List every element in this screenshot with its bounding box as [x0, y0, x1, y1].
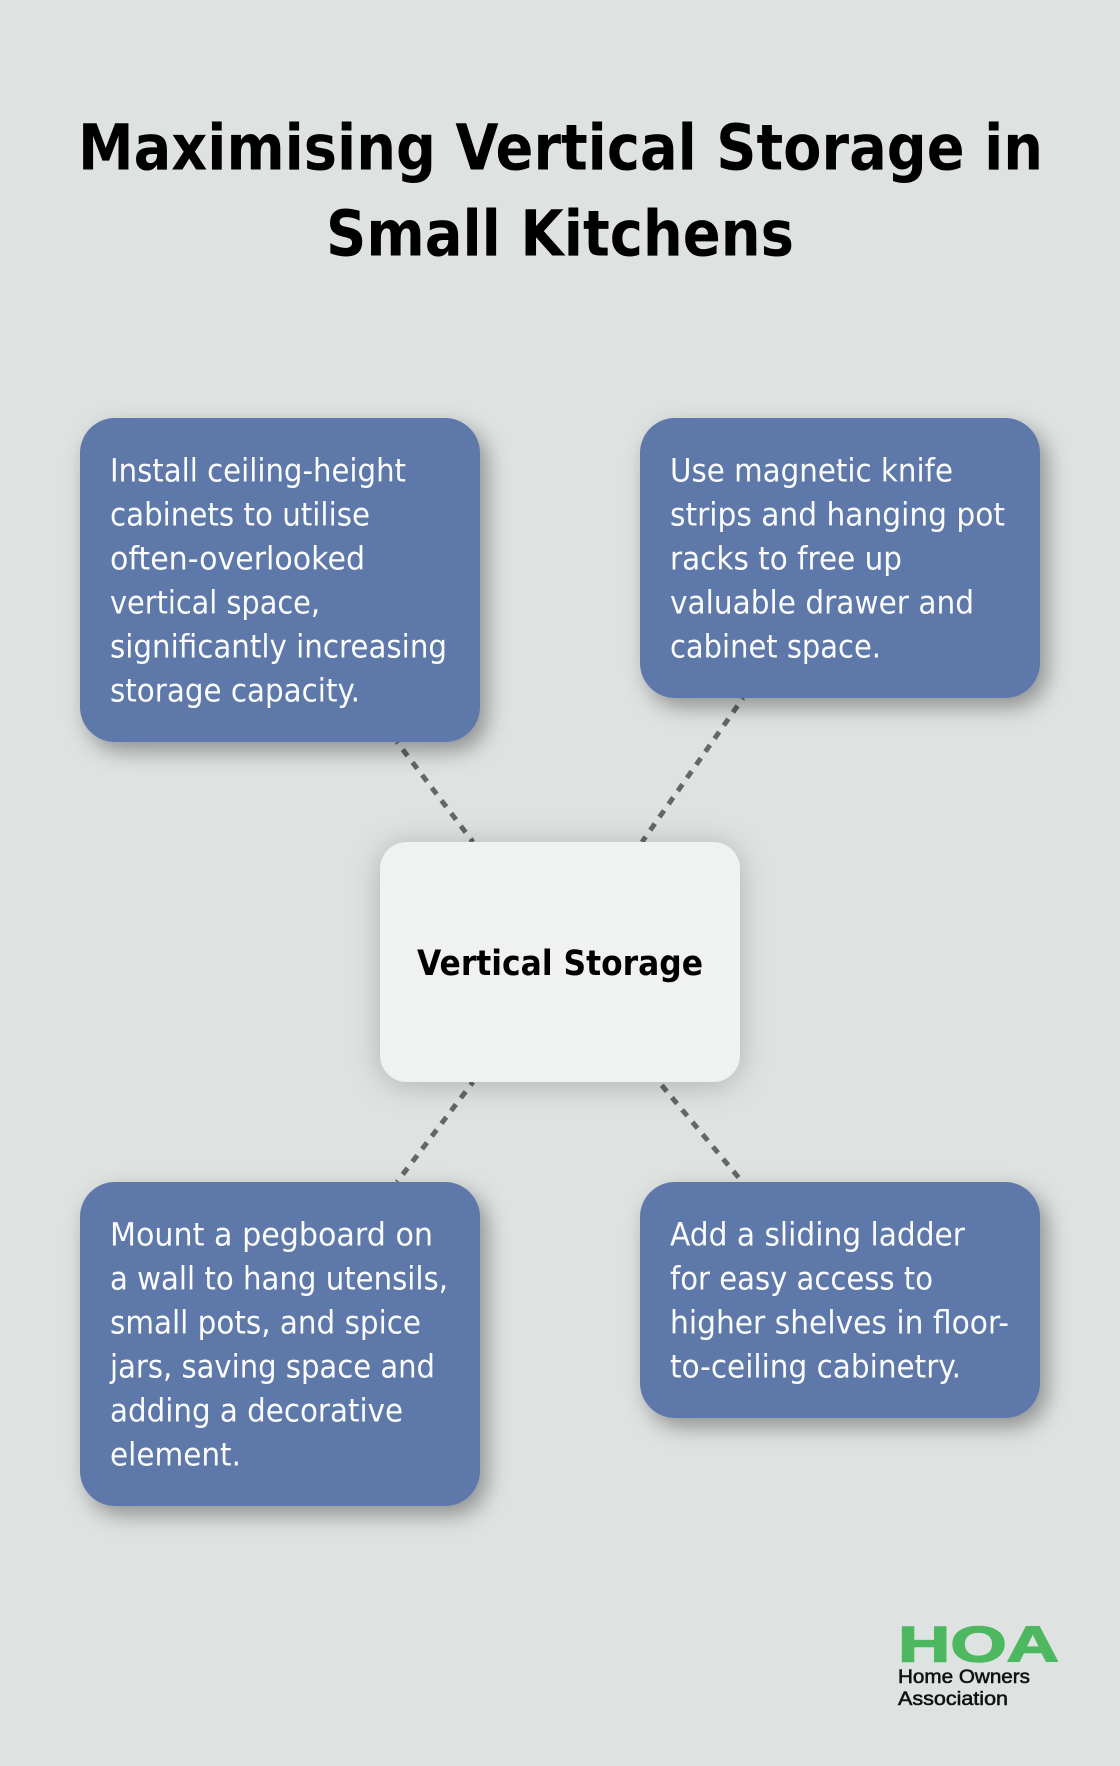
connector: top-left box to centre: [397, 742, 473, 842]
connector: bottom-left box to centre: [397, 1082, 473, 1182]
logo wordmark: Home Owners: [898, 1667, 1030, 1688]
box text: Mount a pegboard on: [110, 1216, 433, 1254]
box text: cabinets to utilise: [110, 496, 370, 534]
box text: strips and hanging pot: [670, 496, 1005, 534]
box text: storage capacity.: [110, 672, 360, 710]
box background: [640, 1182, 1040, 1418]
box text: jars, saving space and: [109, 1348, 435, 1386]
box text: Add a sliding ladder: [670, 1216, 966, 1254]
box text: a wall to hang utensils,: [110, 1260, 448, 1298]
panel: sliding ladder: [640, 1182, 1040, 1418]
box background: [80, 418, 480, 742]
box background: [80, 1182, 480, 1506]
box text: small pots, and spice: [110, 1304, 421, 1342]
logo mark: HOA: [898, 1616, 1059, 1672]
box text: higher shelves in floor-: [670, 1304, 1009, 1342]
connector: top-right box to centre: [642, 698, 743, 842]
panel: ceiling-height cabinets: [80, 418, 480, 742]
panel: pegboard: [80, 1182, 480, 1506]
box text: [110, 452, 447, 710]
title: Small Kitchens: [326, 198, 794, 270]
panel: magnetic strips and pot racks: [640, 418, 1040, 698]
box text: vertical space,: [110, 584, 320, 622]
box text: Install ceiling-height: [110, 452, 406, 490]
connector: bottom-right box to centre: [659, 1082, 739, 1178]
title: [78, 112, 1043, 270]
logo: Home Owners Association: [898, 1616, 1059, 1710]
box background: [640, 418, 1040, 698]
box text: adding a decorative: [110, 1392, 403, 1430]
box text: Use magnetic knife: [670, 452, 953, 490]
box text: cabinet space.: [670, 628, 881, 666]
box text: [670, 1216, 1009, 1386]
box text: valuable drawer and: [670, 584, 974, 622]
box text: to-ceiling cabinetry.: [670, 1348, 961, 1386]
box text: for easy access to: [670, 1260, 933, 1298]
logo wordmark: Association: [898, 1689, 1008, 1710]
logo wordmark: [898, 1667, 1030, 1710]
box text: [670, 452, 1005, 666]
centre box background: [380, 842, 740, 1082]
panel: centre topic: [380, 842, 740, 1082]
box text: significantly increasing: [110, 628, 447, 666]
box text: racks to free up: [670, 540, 902, 578]
centre label: Vertical Storage: [417, 944, 703, 984]
box text: often-overlooked: [110, 540, 365, 578]
box text: element.: [110, 1436, 241, 1474]
box text: [109, 1216, 448, 1474]
